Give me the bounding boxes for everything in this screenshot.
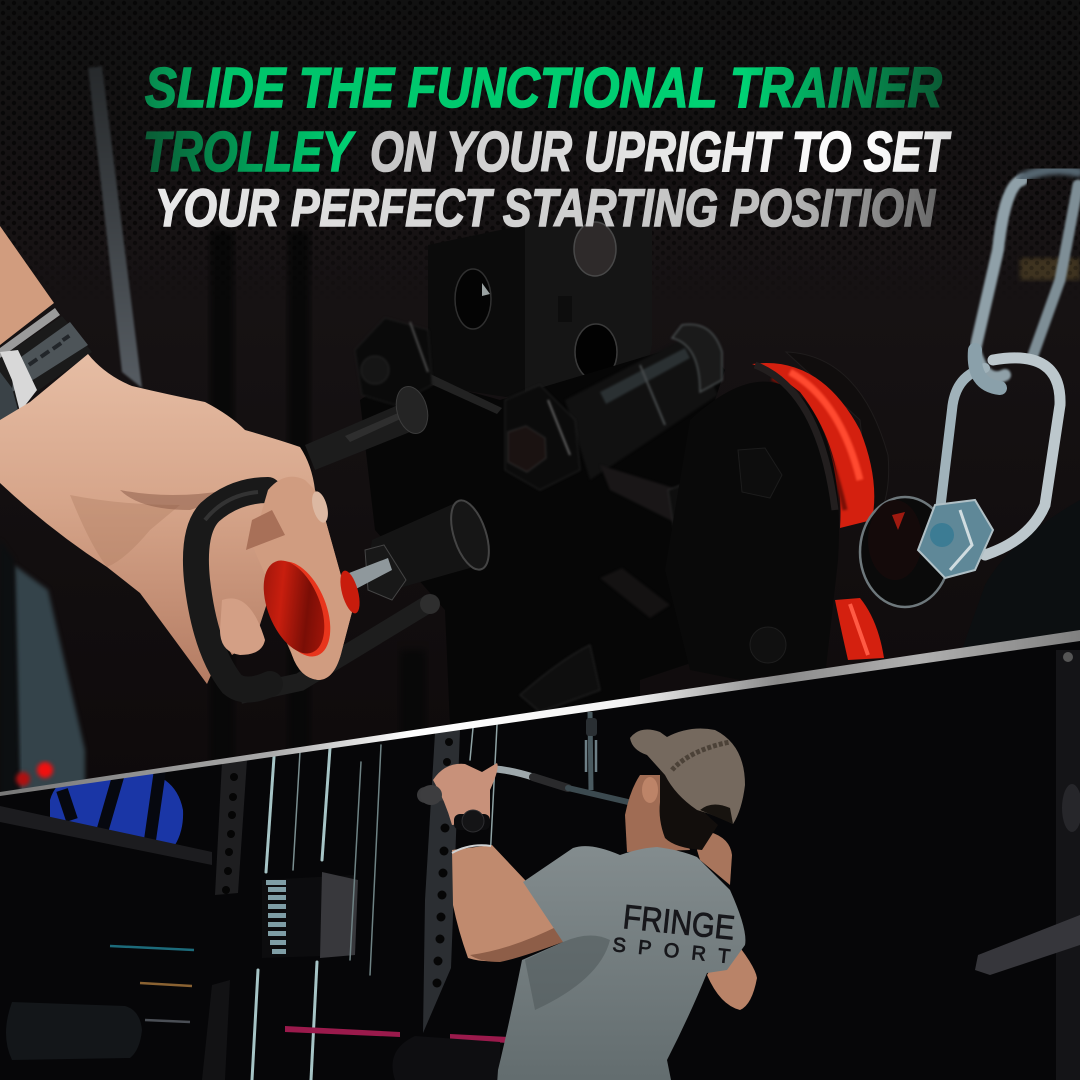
lat bar bbox=[425, 769, 628, 802]
cables bbox=[252, 725, 497, 1080]
title line 2 green: TROLLEY bbox=[143, 120, 356, 184]
colored shelf lines bbox=[110, 946, 194, 1022]
pink bar bbox=[285, 1026, 510, 1043]
title bbox=[143, 56, 951, 238]
left flange and bolt bbox=[355, 318, 432, 405]
forearm bbox=[0, 226, 54, 345]
hand shadows bbox=[70, 495, 180, 567]
bench pad bbox=[960, 500, 1080, 655]
man bbox=[420, 729, 757, 1080]
left hand bbox=[433, 763, 498, 825]
hair bbox=[660, 765, 718, 850]
chain handle hanger bbox=[586, 712, 597, 790]
shirt logo: SPORT bbox=[611, 934, 731, 968]
smart watch bbox=[454, 810, 490, 832]
bracelet bbox=[452, 845, 491, 853]
roller pad bbox=[6, 1002, 142, 1060]
upright column bbox=[428, 220, 652, 400]
fingers bbox=[220, 477, 352, 680]
silver pole bbox=[88, 66, 142, 388]
seat roller bbox=[392, 1036, 500, 1080]
right fist bbox=[697, 832, 732, 885]
D handle bbox=[196, 490, 270, 690]
shirt logo bbox=[611, 898, 737, 968]
main rack upright bbox=[423, 730, 460, 1033]
horizontal tube bbox=[565, 324, 722, 480]
right arm bbox=[707, 935, 757, 1010]
pulley bbox=[665, 352, 889, 680]
ear bbox=[642, 777, 658, 803]
blurred rack left bbox=[14, 565, 85, 795]
t-shirt bbox=[497, 846, 745, 1080]
title line 1: SLIDE THE FUNCTIONAL TRAINER bbox=[145, 56, 942, 120]
trolley assembly bbox=[355, 220, 725, 725]
small link and bolt bbox=[520, 468, 679, 711]
neck and face bbox=[625, 775, 690, 852]
top photo: trolley and hand bbox=[0, 0, 1080, 800]
swivel nut bbox=[918, 500, 993, 578]
diagonal silver divider bbox=[0, 630, 1080, 796]
weight stack bbox=[262, 872, 358, 958]
hand palm bbox=[0, 354, 352, 684]
handle lower tube bbox=[240, 603, 430, 695]
left arm bbox=[452, 845, 563, 961]
bolt flange bbox=[505, 385, 580, 490]
right bracket bbox=[975, 915, 1080, 975]
shelf beam bbox=[0, 806, 212, 865]
watch bbox=[0, 308, 92, 422]
rack left upright bbox=[202, 760, 247, 1080]
right rack post bbox=[1056, 650, 1080, 1080]
mesh texture bbox=[0, 0, 1080, 300]
blue medicine ball bbox=[50, 769, 183, 845]
red knob bbox=[264, 560, 360, 656]
grip end bbox=[420, 785, 442, 805]
shirt logo: FRINGE bbox=[621, 898, 737, 948]
main plate black bbox=[360, 340, 725, 725]
cap bbox=[630, 729, 745, 824]
chain links bbox=[940, 170, 1078, 555]
pulley axle ring bbox=[860, 497, 950, 607]
background wall bbox=[0, 0, 1080, 800]
shirt shadow bbox=[525, 935, 610, 1010]
cylinder and pin bbox=[349, 496, 496, 600]
handle bar top bbox=[305, 383, 433, 470]
bottom photo: man at lat pulldown bbox=[0, 620, 1080, 1080]
red lights bbox=[16, 762, 53, 786]
